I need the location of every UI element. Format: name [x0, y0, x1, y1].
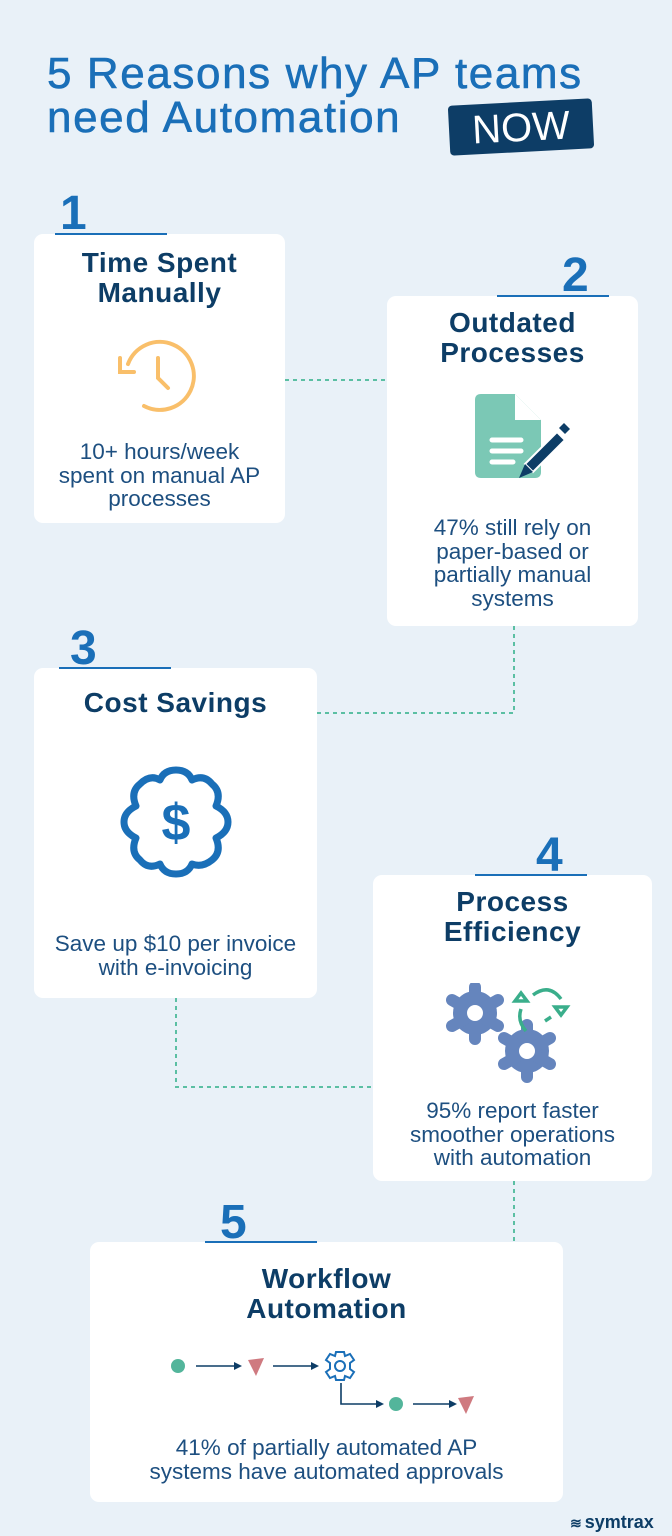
logo: ≋ symtrax [570, 1512, 654, 1532]
panel 2: paper-based or [436, 538, 589, 564]
title: need Automation [47, 93, 401, 142]
panel 1: Manually [98, 277, 221, 308]
NOW badge: NOW [471, 103, 571, 153]
panel 2: 47% still rely on [434, 515, 591, 540]
text: 1 [60, 187, 87, 240]
panel 1: 10+ hours/week [80, 439, 239, 464]
text: 3 [70, 622, 97, 675]
panel 4: Process [456, 886, 569, 917]
panel 4 [373, 875, 652, 1181]
panel 2: systems [471, 586, 554, 610]
text: 4 [536, 829, 563, 882]
panel 2 [387, 296, 638, 626]
panel 3: with e-invoicing [99, 954, 252, 980]
icon: document with pen [475, 394, 570, 478]
text: 2 [562, 249, 589, 302]
panel 3: Cost Savings [84, 687, 267, 718]
panel 5: 41% of partially automated AP [176, 1435, 477, 1460]
panel 5: Automation [246, 1293, 407, 1324]
panel 1: processes [108, 486, 211, 511]
title: 5 Reasons why AP teams [47, 49, 583, 98]
title [47, 49, 583, 142]
panel 1: spent on manual AP [59, 462, 260, 488]
icon: clock [118, 340, 196, 412]
panel 2: Outdated [449, 307, 576, 338]
panel 1: Time Spent [82, 247, 237, 278]
panel 4: with automation [434, 1145, 591, 1170]
workflow diagram [171, 1351, 474, 1414]
icon: dollar badge: $ [162, 794, 191, 852]
panel 2: partially manual [434, 562, 591, 587]
icon: dollar badge [120, 766, 232, 878]
panel 5 [90, 1242, 563, 1502]
panel 3: Save up $10 per invoice [55, 931, 296, 956]
panel 4: smoother operations [410, 1122, 615, 1146]
panel 2: Processes [440, 337, 585, 368]
NOW badge [448, 98, 594, 156]
panel 4: 95% report faster [426, 1098, 599, 1123]
panel 3 [34, 668, 317, 998]
text: 5 [220, 1196, 247, 1249]
panel 1 [34, 234, 285, 523]
icon: gears [446, 983, 570, 1083]
panel 4: Efficiency [444, 916, 581, 947]
panel 5: systems have automated approvals [150, 1458, 503, 1484]
panel 5: Workflow [262, 1263, 391, 1294]
